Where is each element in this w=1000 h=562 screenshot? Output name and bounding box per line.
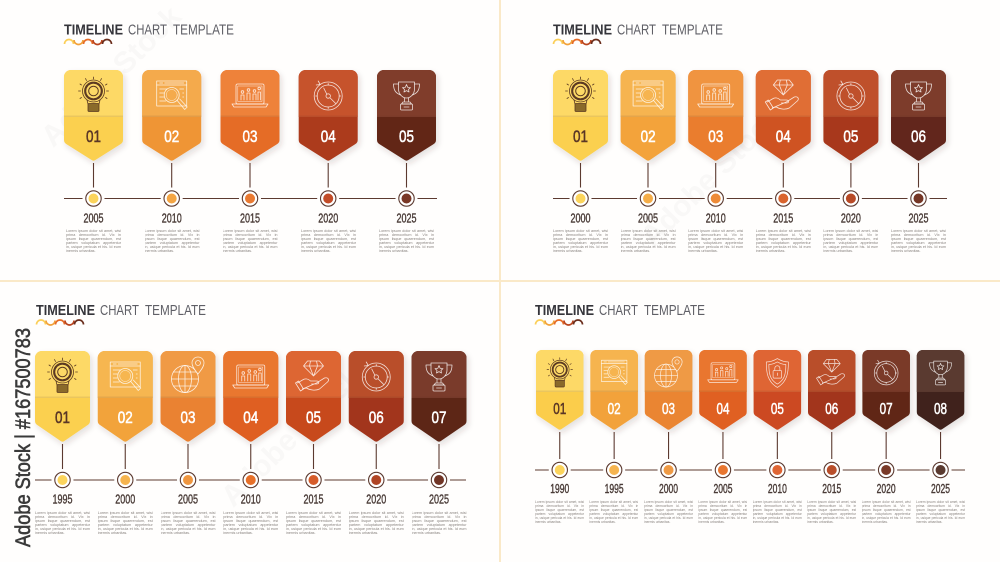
node 2020: 2020 <box>366 492 386 506</box>
text block 5: Lorem ipsum dolor sit amet, wisi prima democritum id. Vix in ipsum lisque quaerendum, est partem voluptatum appetentur in, usique pericula et his. Id eum inermis urbanitas. <box>286 511 341 535</box>
card 03: 03 <box>662 401 675 418</box>
card 01: 01 <box>55 408 70 427</box>
heading: TIMELINE <box>553 22 612 38</box>
card 03: 03 <box>180 408 196 427</box>
text block 1: Lorem ipsum dolor sit amet, wisi prima democritum id. Vix in ipsum lisque quaerendum, est partem voluptatum appetentur in, usique pericula et his. Id eum inermis urbanitas. <box>66 229 121 253</box>
heading: TEMPLATE <box>662 22 723 38</box>
node 2000: 2000 <box>659 482 678 496</box>
node 2020: 2020 <box>318 212 338 226</box>
heading: TEMPLATE <box>145 302 206 319</box>
card 05 <box>754 350 801 430</box>
heading: CHART <box>100 302 139 319</box>
card 06: 06 <box>911 127 926 146</box>
node 2015: 2015 <box>773 212 793 226</box>
text block 5: Lorem ipsum dolor sit amet, wisi prima democritum id. Vix in ipsum lisque quaerendum, est partem voluptatum appetentur in, usique pericula et his. Id eum inermis urbanitas. <box>823 229 878 253</box>
node 2005: 2005 <box>713 482 732 496</box>
text block 3: Lorem ipsum dolor sit amet, wisi prima democritum id. Vix in ipsum lisque quaerendum, est partem voluptatum appetentur in, usique pericula et his. Id eum inermis urbanitas. <box>644 500 693 524</box>
text block 6: Lorem ipsum dolor sit amet, wisi prima democritum id. Vix in ipsum lisque quaerendum, est partem voluptatum appetentur in, usique pericula et his. Id eum inermis urbanitas. <box>349 511 404 535</box>
node 2020 <box>365 444 387 506</box>
node 1990 <box>549 432 571 496</box>
text block 3: Lorem ipsum dolor sit amet, wisi prima democritum id. Vix in ipsum lisque quaerendum, est partem voluptatum appetentur in, usique pericula et his. Id eum inermis urbanitas. <box>160 511 216 535</box>
node 1995: 1995 <box>605 482 624 496</box>
text block 7: Lorem ipsum dolor sit amet, wisi prima democritum id. Vix in ipsum lisque quaerendum, est partem voluptatum appetentur in, usique pericula et his. Id eum inermis urbanitas. <box>862 500 911 524</box>
node 2015 <box>821 432 843 496</box>
text block 3: Lorem ipsum dolor sit amet, wisi prima democritum id. Vix in ipsum lisque quaerendum, est partem voluptatum appetentur in, usique pericula et his. Id eum inermis urbanitas. <box>688 229 743 253</box>
card 05: 05 <box>306 408 321 427</box>
card 04: 04 <box>776 127 791 146</box>
node 2015 <box>772 163 794 226</box>
card 04: 04 <box>716 401 730 418</box>
heading <box>64 22 234 38</box>
node 2000 <box>658 432 680 496</box>
card 05 <box>286 351 341 442</box>
heading squiggle <box>554 40 600 44</box>
heading: TEMPLATE <box>173 22 234 38</box>
text block 4: Lorem ipsum dolor sit amet, wisi prima democritum id. Vix in ipsum lisque quaerendum, est partem voluptatum appetentur in, usique pericula et his. Id eum inermis urbanitas. <box>223 511 278 535</box>
node 2025 <box>396 163 418 226</box>
watermark: Adobe Stock: Adobe Stock <box>215 360 368 513</box>
node 1995 <box>603 432 625 496</box>
node 2005 <box>82 163 104 226</box>
node 2000: 2000 <box>570 212 591 226</box>
heading squiggle <box>536 320 582 325</box>
node 2025: 2025 <box>908 212 929 226</box>
card 05: 05 <box>771 401 784 418</box>
node 1995: 1995 <box>52 492 73 506</box>
timeline axis <box>64 198 437 200</box>
card 07: 07 <box>432 408 446 427</box>
node 2020: 2020 <box>841 212 861 226</box>
card 03: 03 <box>242 127 258 146</box>
node 2015: 2015 <box>304 492 324 506</box>
watermark: Adobe Stock: Adobe Stock <box>635 100 788 253</box>
card 02 <box>621 70 676 161</box>
card 07 <box>862 350 910 430</box>
card 07: 07 <box>880 401 893 418</box>
node 2015: 2015 <box>822 482 841 496</box>
text block 4: Lorem ipsum dolor sit amet, wisi prima democritum id. Vix in ipsum lisque quaerendum, est partem voluptatum appetentur in, usique pericula et his. Id eum inermis urbanitas. <box>756 229 811 253</box>
card 05: 05 <box>399 127 414 146</box>
card 04 <box>223 351 278 442</box>
node 2010: 2010 <box>768 482 787 496</box>
node 2010: 2010 <box>706 212 726 226</box>
heading: TIMELINE <box>64 22 123 38</box>
card 02: 02 <box>608 401 621 418</box>
node 2000: 2000 <box>115 492 135 506</box>
text block 4: Lorem ipsum dolor sit amet, wisi prima democritum id. Vix in ipsum lisque quaerendum, est partem voluptatum appetentur in, usique pericula et his. Id eum inermis urbanitas. <box>301 229 356 253</box>
card 05 <box>823 70 878 161</box>
timeline axis <box>535 469 965 471</box>
card 01: 01 <box>86 127 101 146</box>
card 02: 02 <box>118 408 133 427</box>
text block 4: Lorem ipsum dolor sit amet, wisi prima democritum id. Vix in ipsum lisque quaerendum, est partem voluptatum appetentur in, usique pericula et his. Id eum inermis urbanitas. <box>698 500 747 524</box>
node 1995 <box>52 444 74 506</box>
card 05 <box>377 70 436 161</box>
node 2000 <box>570 163 592 226</box>
text block 2: Lorem ipsum dolor sit amet, wisi prima democritum id. Vix in ipsum lisque quaerendum, est partem voluptatum appetentur in, usique pericula et his. Id eum inermis urbanitas. <box>144 229 200 253</box>
text block 6: Lorem ipsum dolor sit amet, wisi prima democritum id. Vix in ipsum lisque quaerendum, est partem voluptatum appetentur in, usique pericula et his. Id eum inermis urbanitas. <box>807 500 856 524</box>
heading squiggle <box>36 320 84 325</box>
node 2010: 2010 <box>241 492 261 506</box>
node 2015 <box>239 163 261 226</box>
card 02 <box>590 350 638 430</box>
node 2025 <box>908 163 930 226</box>
card 06: 06 <box>825 401 838 418</box>
text block 6: Lorem ipsum dolor sit amet, wisi prima democritum id. Vix in ipsum lisque quaerendum, est partem voluptatum appetentur in, usique pericula et his. Id eum inermis urbanitas. <box>891 229 946 253</box>
panel: 7-step timeline <box>35 302 470 535</box>
text block 2: Lorem ipsum dolor sit amet, wisi prima democritum id. Vix in ipsum lisque quaerendum, est partem voluptatum appetentur in, usique pericula et his. Id eum inermis urbanitas. <box>589 500 638 524</box>
card 04: 04 <box>321 127 336 146</box>
node 2020: 2020 <box>877 482 896 496</box>
text block 3: Lorem ipsum dolor sit amet, wisi prima democritum id. Vix in ipsum lisque quaerendum, est partem voluptatum appetentur in, usique pericula et his. Id eum inermis urbanitas. <box>222 229 278 253</box>
node 2015 <box>302 444 324 506</box>
node 2015: 2015 <box>240 212 260 226</box>
text block 2: Lorem ipsum dolor sit amet, wisi prima democritum id. Vix in ipsum lisque quaerendum, est partem voluptatum appetentur in, usique pericula et his. Id eum inermis urbanitas. <box>621 229 676 253</box>
card 08 <box>917 350 964 430</box>
heading: TEMPLATE <box>644 302 705 319</box>
card 05: 05 <box>843 127 858 146</box>
text block 5: Lorem ipsum dolor sit amet, wisi prima democritum id. Vix in ipsum lisque quaerendum, est partem voluptatum appetentur in, usique pericula et his. Id eum inermis urbanitas. <box>753 500 802 524</box>
card 02: 02 <box>164 127 179 146</box>
node 2025 <box>930 432 952 496</box>
panel: 6-step timeline <box>552 22 950 253</box>
node 2005: 2005 <box>178 492 198 506</box>
card 01: 01 <box>553 401 566 418</box>
horizontal divider <box>0 280 1000 282</box>
card 06 <box>891 70 946 161</box>
node 2025 <box>428 444 450 506</box>
node 2005: 2005 <box>638 212 658 226</box>
card 02 <box>98 351 153 442</box>
card 01 <box>553 70 608 161</box>
panel: 5-step timeline <box>64 22 440 253</box>
node 2025: 2025 <box>931 482 950 496</box>
card 01 <box>64 70 123 161</box>
node 2005: 2005 <box>84 212 104 226</box>
card 03 <box>160 351 216 442</box>
node 2010 <box>766 432 788 496</box>
card 06: 06 <box>369 408 384 427</box>
heading <box>36 302 206 319</box>
node 2025: 2025 <box>396 212 417 226</box>
node 2005 <box>712 432 734 496</box>
text block 2: Lorem ipsum dolor sit amet, wisi prima democritum id. Vix in ipsum lisque quaerendum, est partem voluptatum appetentur in, usique pericula et his. Id eum inermis urbanitas. <box>98 511 153 535</box>
node 2010 <box>705 163 727 226</box>
timeline axis <box>35 479 466 481</box>
heading <box>553 22 723 38</box>
card 01: 01 <box>573 127 588 146</box>
text block 7: Lorem ipsum dolor sit amet, wisi prima democritum id. Vix in ipsum lisque quaerendum, est partem voluptatum appetentur in, usique pericula et his. Id eum inermis urbanitas. <box>412 511 466 535</box>
heading: CHART <box>599 302 638 319</box>
timeline axis <box>553 198 947 200</box>
vertical divider <box>499 0 501 562</box>
card 01 <box>35 351 90 442</box>
heading: CHART <box>128 22 167 38</box>
card 04 <box>299 70 358 161</box>
card 04 <box>756 70 811 161</box>
card 06 <box>349 351 404 442</box>
node 2005 <box>177 444 199 506</box>
card 04 <box>699 350 747 430</box>
node 2010 <box>240 444 262 506</box>
node 1990: 1990 <box>550 482 569 496</box>
card 06 <box>808 350 856 430</box>
heading <box>535 302 705 319</box>
watermark: Adobe Stock: Adobe Stock <box>35 0 188 153</box>
heading squiggle <box>64 40 112 44</box>
node 2020 <box>875 432 897 496</box>
card 03: 03 <box>708 127 723 146</box>
card 04: 04 <box>243 408 258 427</box>
text block 1: Lorem ipsum dolor sit amet, wisi prima democritum id. Vix in ipsum lisque quaerendum, est partem voluptatum appetentur in, usique pericula et his. Id eum inermis urbanitas. <box>35 511 90 535</box>
card 03 <box>688 70 743 161</box>
node 2010: 2010 <box>162 212 182 226</box>
card 08: 08 <box>934 401 947 418</box>
node 2005 <box>637 163 659 226</box>
card 01 <box>536 350 584 430</box>
card 03 <box>645 350 692 430</box>
node 2025: 2025 <box>429 492 449 506</box>
text block 1: Lorem ipsum dolor sit amet, wisi prima democritum id. Vix in ipsum lisque quaerendum, est partem voluptatum appetentur in, usique pericula et his. Id eum inermis urbanitas. <box>535 500 584 524</box>
card 02 <box>142 70 201 161</box>
node 2010 <box>161 163 183 226</box>
text block 1: Lorem ipsum dolor sit amet, wisi prima democritum id. Vix in ipsum lisque quaerendum, est partem voluptatum appetentur in, usique pericula et his. Id eum inermis urbanitas. <box>553 229 608 253</box>
heading: TIMELINE <box>36 302 95 319</box>
card 02: 02 <box>641 127 656 146</box>
node 2000 <box>114 444 136 506</box>
node 2020 <box>840 163 862 226</box>
text block 5: Lorem ipsum dolor sit amet, wisi prima democritum id. Vix in ipsum lisque quaerendum, est partem voluptatum appetentur in, usique pericula et his. Id eum inermis urbanitas. <box>379 229 434 253</box>
heading: TIMELINE <box>535 302 594 319</box>
text block 8: Lorem ipsum dolor sit amet, wisi prima democritum id. Vix in ipsum lisque quaerendum, est partem voluptatum appetentur in, usique pericula et his. Id eum inermis urbanitas. <box>916 500 965 524</box>
node 2020 <box>317 163 339 226</box>
panel: 8-step timeline <box>534 302 968 524</box>
heading: CHART <box>617 22 656 38</box>
card 03 <box>220 70 280 161</box>
card 07 <box>412 351 466 442</box>
